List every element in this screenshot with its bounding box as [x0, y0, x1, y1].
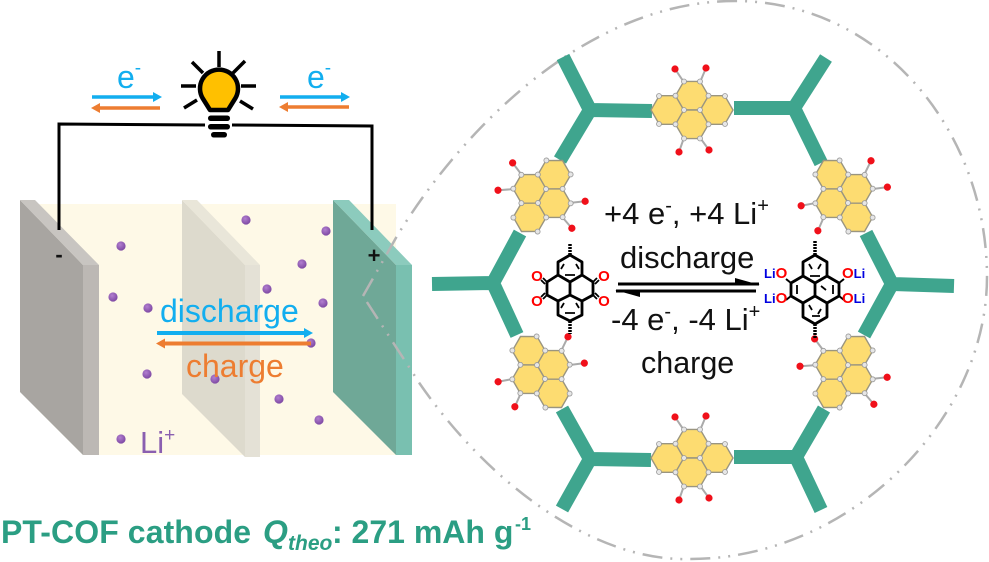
reaction: discharge conditions: , +4 Li	[672, 196, 757, 231]
reaction: charge conditions: -	[664, 301, 671, 323]
pyrene unit: upper right	[784, 138, 904, 254]
callout outline	[363, 1, 987, 559]
label: discharge: discharge	[160, 293, 299, 329]
title: capacity caption: -1	[515, 514, 531, 534]
pyrene unit: top	[651, 64, 733, 156]
molecule: lithiated form	[764, 240, 865, 339]
reaction: discharge conditions: +4 e	[604, 196, 665, 231]
reaction: discharge label: discharge	[620, 240, 754, 275]
separator plate	[182, 200, 260, 457]
electron flow: right: e	[307, 59, 325, 95]
molecule: quinone form	[531, 243, 610, 334]
electrolyte background	[35, 204, 396, 455]
title: capacity caption: Q	[263, 514, 288, 550]
linker: left	[432, 233, 520, 335]
pyrene unit: lower left	[481, 314, 601, 430]
linker: right	[864, 233, 954, 335]
terminal: plus: +	[368, 243, 380, 268]
reaction: charge label: charge	[641, 346, 734, 380]
icon: light bulb	[181, 51, 256, 138]
electron flow: right	[279, 58, 350, 112]
COF framework	[432, 57, 954, 510]
molecule: quinone form: O	[531, 293, 543, 310]
label: Li+: +	[164, 425, 175, 446]
title: capacity caption: theo	[288, 532, 332, 555]
pyrene unit: lower right	[784, 314, 904, 430]
molecule: quinone form: O	[531, 268, 543, 285]
electron flow: right: -	[325, 58, 331, 79]
linker: top left	[560, 57, 652, 160]
anode plate	[0, 190, 99, 455]
molecule: lithiated form: LiO	[764, 265, 788, 282]
molecule: quinone form: O	[598, 268, 610, 285]
linker: bottom right	[734, 409, 824, 510]
pyrene unit: upper left	[482, 138, 602, 254]
pyrene unit: bottom	[651, 412, 733, 504]
reaction: charge conditions: +	[749, 301, 760, 323]
arrow: discharge	[157, 328, 313, 338]
reaction: discharge conditions: +	[757, 195, 769, 217]
lithium ions	[108, 215, 331, 444]
reaction: charge conditions: , -4 Li	[671, 302, 749, 337]
molecule: lithiated form: OLi	[842, 265, 865, 282]
electron flow: left	[91, 58, 162, 113]
title: capacity caption: : 271 mAh g	[332, 514, 513, 550]
linker: bottom left	[562, 409, 651, 509]
arrow: charge	[156, 338, 311, 348]
equilibrium arrows	[615, 278, 760, 297]
title: capacity caption: PT-COF cathode	[1, 514, 251, 550]
molecule: lithiated form: LiO	[764, 290, 788, 307]
cathode plate	[333, 200, 412, 455]
molecule: lithiated form: OLi	[842, 290, 865, 307]
electron flow: left: e	[117, 59, 135, 95]
reaction: discharge conditions: -	[665, 195, 672, 217]
terminal: minus: -	[55, 242, 63, 267]
reaction: charge conditions: -4 e	[611, 302, 664, 337]
panel: battery cell	[0, 190, 412, 460]
circuit wire	[59, 124, 372, 230]
molecule: quinone form: O	[598, 293, 610, 310]
label: Li+: Li	[140, 425, 164, 460]
linker: top right	[734, 58, 826, 163]
label: charge: charge	[186, 348, 284, 384]
electron flow: left: -	[135, 58, 141, 79]
